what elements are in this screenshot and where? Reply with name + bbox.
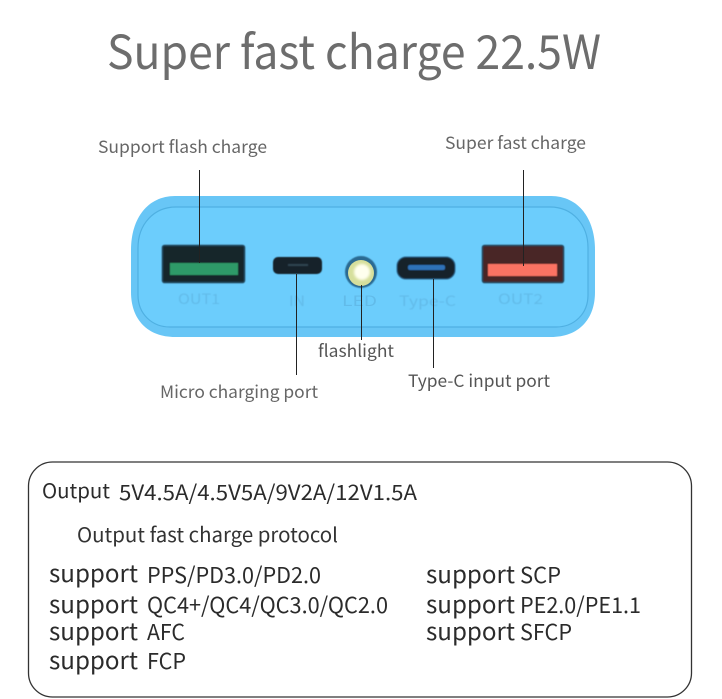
protocol list right: support <box>426 585 515 620</box>
label: Super fast charge: Super fast charge <box>445 129 586 154</box>
port: OUT2 USB <box>482 246 564 309</box>
protocol list left: QC4+/QC4/QC3.0/QC2.0 <box>147 588 388 620</box>
protocol list left: PPS/PD3.0/PD2.0 <box>147 558 321 590</box>
protocol list right: SCP <box>520 558 561 590</box>
protocol list right: support <box>426 612 515 647</box>
device body <box>131 196 595 337</box>
protocol list left: support <box>49 554 138 589</box>
label: flashlight <box>318 285 395 362</box>
port: Type-C: Type-C <box>399 291 456 311</box>
protocol list left: FCP <box>147 644 186 676</box>
port: OUT2 USB: OUT2 <box>498 289 543 309</box>
protocol heading: Output fast charge protocol <box>77 519 338 548</box>
label: Type-C input port: Type-C input port <box>408 367 551 392</box>
label: Micro charging port: Micro charging port <box>160 378 319 403</box>
protocol list right: PE2.0/PE1.1 <box>520 588 641 620</box>
output voltage line: 5V4.5A/4.5V5A/9V2A/12V1.5A <box>119 477 417 507</box>
protocol list right <box>426 555 641 647</box>
protocol list left <box>49 554 388 676</box>
LED flashlight <box>342 256 377 311</box>
protocol list left: support <box>49 641 138 676</box>
protocol list left: support <box>49 612 138 647</box>
port: OUT1 USB <box>162 246 244 309</box>
protocol list right: support <box>426 555 515 590</box>
panel: output specifications <box>28 462 692 697</box>
protocol list left: AFC <box>147 615 185 647</box>
LED flashlight: LED <box>342 291 377 311</box>
port: micro USB IN <box>273 257 322 311</box>
port: Type-C <box>397 257 456 311</box>
port: OUT1 USB: OUT1 <box>178 289 220 309</box>
power bank device <box>131 196 595 337</box>
output voltage line: Output <box>42 475 110 504</box>
port: micro USB IN: IN <box>289 291 305 311</box>
label: Support flash charge: Support flash charge <box>98 133 267 158</box>
device face <box>138 207 588 327</box>
panel border <box>28 462 692 697</box>
protocol list left: support <box>49 585 138 620</box>
protocol list right: SFCP <box>520 615 572 647</box>
title: Super fast charge 22.5W <box>107 14 601 83</box>
label: flashlight: flashlight <box>318 337 395 362</box>
